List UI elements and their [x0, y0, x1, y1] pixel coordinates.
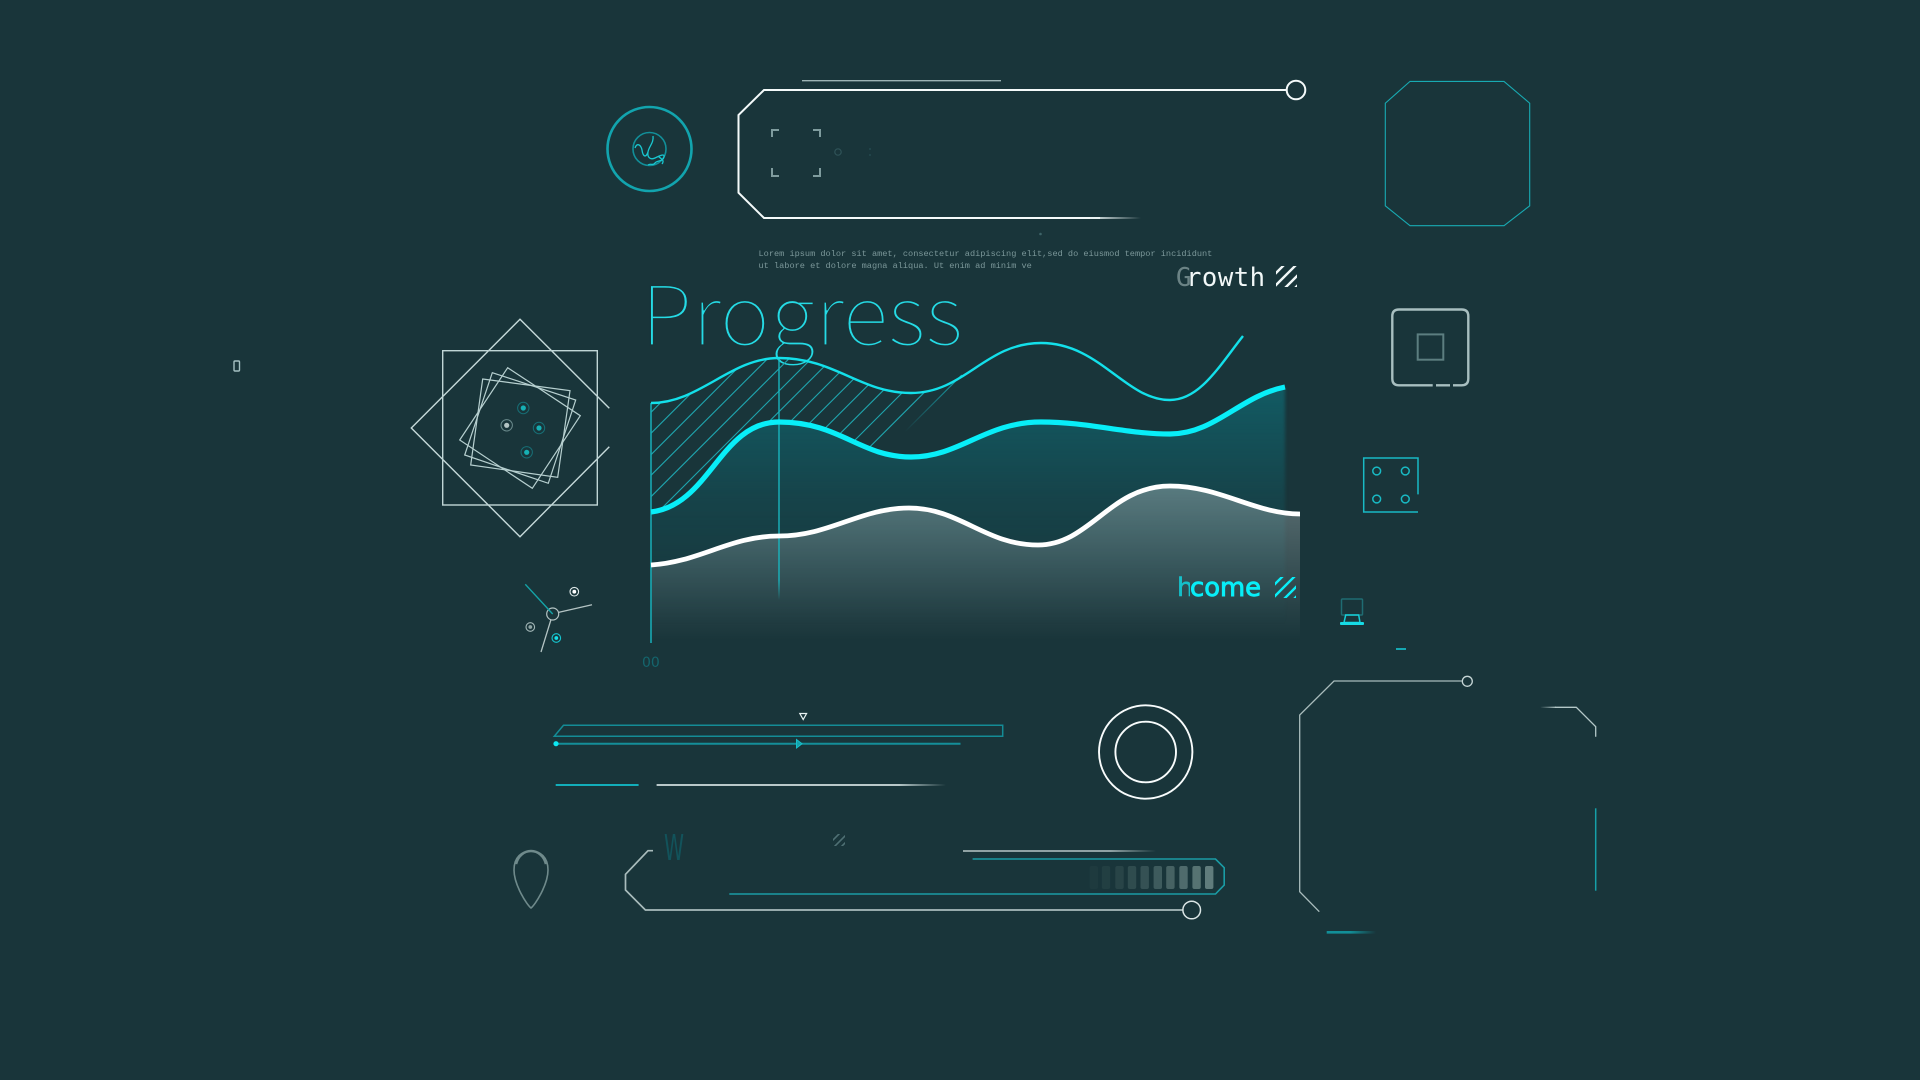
label: income: come — [1190, 573, 1261, 603]
node tri-spoke icon — [525, 584, 592, 652]
top thin cyan line — [651, 336, 1243, 403]
title: Progress — [641, 250, 963, 369]
lorem ipsum text block — [758, 249, 1212, 271]
faint marker dots — [835, 148, 1042, 235]
rounded square button — [1392, 310, 1468, 385]
thick cyan line — [651, 387, 1285, 512]
small dash — [1396, 648, 1406, 650]
tiny marker far left — [234, 361, 240, 371]
teal side line — [1595, 808, 1597, 891]
axis label: 00 — [642, 655, 660, 671]
label: growth — [1177, 266, 1297, 287]
fading line above meter — [963, 850, 1156, 852]
bottom frame — [626, 851, 1200, 919]
progress track — [554, 725, 1003, 736]
segmented meter — [1090, 866, 1213, 889]
label: growth: rowth — [1186, 263, 1266, 293]
top frame panel — [738, 81, 1305, 218]
icon: globe in ring — [608, 107, 692, 191]
icon: laptop — [1340, 599, 1364, 625]
ghost stripes — [833, 834, 845, 846]
focus brackets — [772, 130, 820, 176]
lorem ipsum text block: Lorem ipsum dolor sit amet, consectetur adipiscing elit,sed do eiusmod tempor incididunt — [758, 249, 1212, 259]
lorem ipsum text block: ut labore et dolore magna aliqua. Ut enim ad minim ve — [758, 261, 1032, 271]
upper right corner — [1541, 707, 1596, 737]
icon: drop — [514, 851, 548, 908]
hatching — [652, 360, 924, 507]
rotating squares emblem — [411, 319, 609, 537]
teal meter frame — [729, 859, 1224, 894]
cyan series area — [652, 388, 1286, 552]
white series area — [651, 486, 1300, 650]
large bracket frame — [1300, 676, 1472, 912]
dice box — [1364, 458, 1418, 512]
teal bottom line — [1327, 931, 1376, 934]
vertical marker — [778, 358, 780, 600]
label: income: h — [1177, 573, 1193, 603]
octagon frame — [1385, 81, 1530, 226]
slider — [553, 740, 960, 748]
divider lines — [556, 784, 946, 786]
hatch tail — [905, 375, 962, 432]
label: income — [1179, 576, 1296, 598]
y axis — [650, 403, 652, 643]
thick white line — [651, 486, 1300, 565]
area chart — [650, 335, 1300, 643]
label: growth: G — [1176, 263, 1191, 293]
marker triangle — [800, 714, 807, 720]
concentric rings — [1099, 705, 1192, 799]
ghost letter W: W — [664, 828, 684, 869]
